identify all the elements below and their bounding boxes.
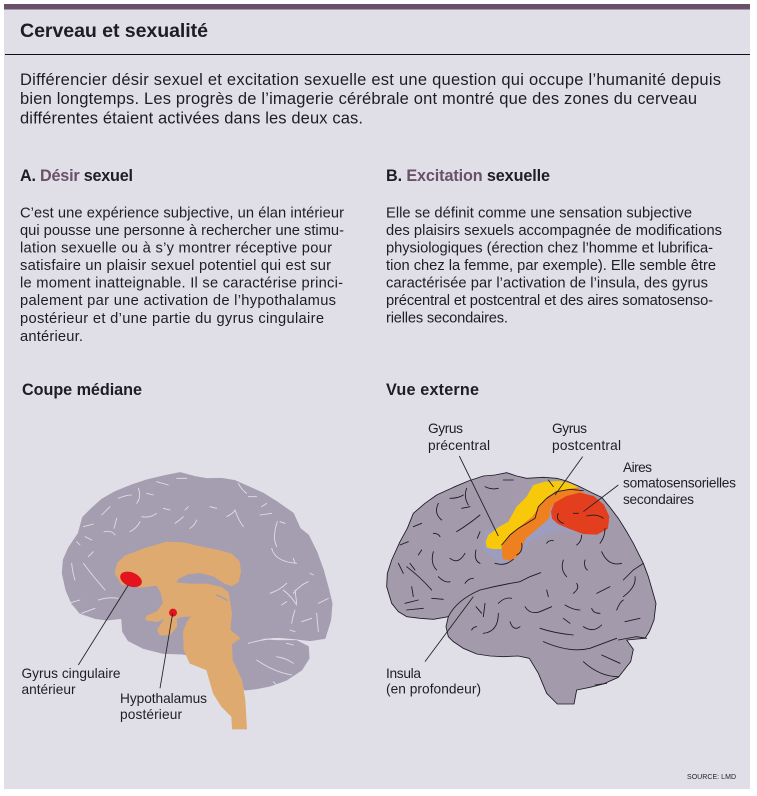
text block: désir sexuel: palement par une activation de l’hypothalamus [20, 293, 336, 309]
diagram: vue externe du cerveau [387, 456, 656, 704]
heading: A. Désir sexuel: A. Désir sexuel [20, 167, 133, 185]
heading: Coupe médiane: Coupe médiane [22, 381, 142, 399]
label: Aires somatosensorielles secondaires: secondaires [623, 492, 694, 507]
label: Aires somatosensorielles secondaires [623, 460, 736, 507]
label: Hypothalamus postérieur: Hypothalamus [120, 691, 207, 706]
text block: excitation sexuelle: caractérisée par l’activation de l’insula, des gyrus [386, 275, 708, 291]
halo bleuté autour des gyrus [483, 515, 577, 563]
title: Cerveau et sexualité [20, 20, 208, 42]
text block: désir sexuel: antérieur. [20, 329, 83, 345]
text block: excitation sexuelle: tion chez la femme, par exemple). Elle semble être [386, 258, 716, 274]
sulci [398, 480, 647, 685]
text block: excitation sexuelle: physiologiques (érection chez l’homme et lubrifica- [386, 240, 713, 256]
text block: excitation sexuelle: Elle se définit comme une sensation subjective [386, 205, 692, 221]
source: SOURCE: LMD [687, 774, 736, 781]
text block: désir sexuel: lation sexuelle ou à s’y montrer réceptive pour [20, 240, 332, 256]
label: Gyrus précentral [428, 421, 490, 453]
label: Aires somatosensorielles secondaires: Aires [623, 460, 652, 475]
brain silhouette [387, 473, 656, 704]
grey inner slit [216, 595, 227, 601]
gyrus postcentral [502, 488, 583, 560]
label: Gyrus cingulaire antérieur: antérieur [22, 682, 76, 697]
heading: B. Excitation sexuelle: B. Excitation sexuelle [386, 167, 550, 185]
text block: excitation sexuelle [386, 205, 722, 326]
zone rouge: gyrus cingulaire antérieur [118, 569, 144, 590]
aires somatosensorielles secondaires [552, 493, 609, 534]
label: Insula: Insula [386, 666, 421, 681]
leader lines [425, 456, 618, 662]
intro text: différentes étaient activées dans les deux cas. [20, 110, 363, 128]
text block: excitation sexuelle: précentral et postcentral et des aires somatosenso- [386, 293, 713, 309]
heading: Vue externe: Vue externe [386, 381, 479, 399]
label: Hypothalamus postérieur [120, 691, 207, 722]
top bar [4, 4, 750, 10]
label: Insula: (en profondeur) [386, 682, 481, 696]
label: Gyrus postcentral: postcentral [552, 438, 621, 453]
label: Gyrus précentral: Gyrus [428, 421, 463, 436]
label: Aires somatosensorielles secondaires: somatosensorielles [623, 476, 736, 490]
intro text: bien longtemps. Les progrès de l’imagerie cérébrale ont montré que des zones du cerveau [20, 90, 697, 108]
text block: désir sexuel: satisfaire un plaisir sexuel potentiel qui est sur [20, 258, 331, 274]
text block: désir sexuel: postérieur et d’une partie du gyrus cingulaire [20, 311, 324, 327]
label: Gyrus cingulaire antérieur [22, 666, 120, 697]
label: Gyrus postcentral [552, 421, 621, 453]
intro text [20, 71, 721, 128]
label: Insula [386, 666, 481, 696]
gyrus précentral [486, 481, 578, 549]
text block: désir sexuel: C’est une expérience subjective, un élan intérieur [20, 205, 344, 221]
text block: désir sexuel: le moment inatteignable. Il se caractérise princi- [20, 275, 343, 291]
text block: désir sexuel: qui pousse une personne à rechercher une stimu- [20, 223, 344, 239]
light sulci [68, 478, 328, 685]
text block: excitation sexuelle: rielles secondaires. [386, 310, 508, 326]
intro text: Différencier désir sexuel et excitation sexuelle est une question qui occupe l’humanité depuis [20, 71, 721, 89]
text block: désir sexuel [20, 205, 344, 345]
zone rouge: hypothalamus postérieur [169, 609, 177, 617]
label: Hypothalamus postérieur: postérieur [120, 707, 182, 722]
label: Gyrus cingulaire antérieur: Gyrus cingulaire [22, 666, 120, 681]
text block: excitation sexuelle: des plaisirs sexuels accompagnée de modifications [386, 223, 722, 239]
diagram: coupe médiane du cerveau [62, 473, 332, 729]
label: Gyrus précentral: précentral [428, 438, 490, 453]
label: Gyrus postcentral: Gyrus [552, 421, 587, 436]
brain silhouette [62, 473, 332, 690]
leader lines [78, 585, 173, 688]
corps calleux et tronc cérébral [115, 542, 247, 729]
